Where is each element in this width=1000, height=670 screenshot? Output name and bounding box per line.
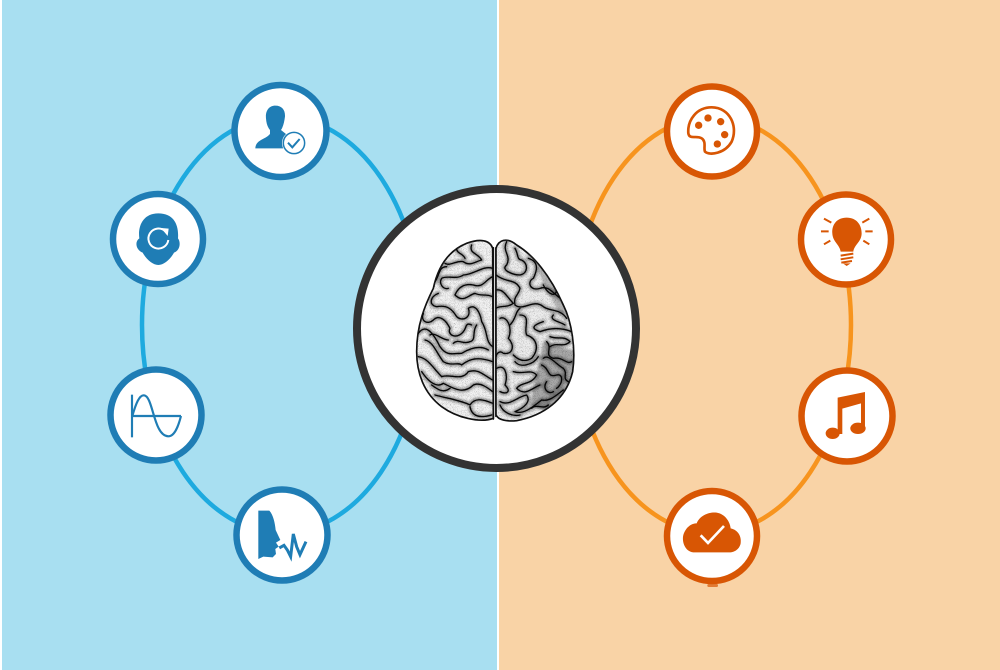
- icon: head with refresh: [136, 213, 180, 265]
- central brain circle: [357, 189, 636, 468]
- blue connecting ring: [142, 117, 422, 533]
- node: speaking face: [236, 490, 328, 580]
- node: head with refresh: [113, 194, 203, 284]
- icon: music note: [826, 392, 866, 439]
- icon: person with check: [255, 106, 306, 155]
- node: palette: [667, 86, 757, 176]
- orange connecting ring: [573, 117, 851, 533]
- node: light bulb: [801, 194, 891, 284]
- icon: light bulb: [821, 218, 873, 266]
- node: sine wave: [110, 370, 202, 460]
- illustration: brain: [413, 235, 577, 425]
- icon: cloud with check: [683, 512, 741, 587]
- node: music note: [802, 370, 892, 462]
- icon: sine wave: [132, 395, 181, 437]
- node: cloud with check: [667, 491, 757, 587]
- icon: speaking face: [258, 511, 306, 559]
- node: person with check: [234, 85, 326, 177]
- brain shading: [413, 235, 577, 425]
- icon: palette: [688, 107, 734, 154]
- panel: left blue background: [2, 0, 497, 670]
- panel: right orange background: [499, 0, 1000, 670]
